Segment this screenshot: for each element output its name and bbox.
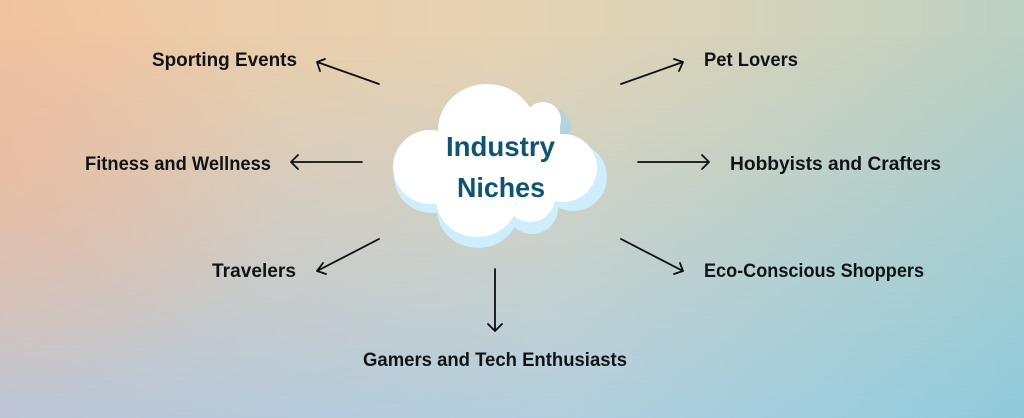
label: Gamers and Tech Enthusiasts: Gamers and Tech Enthusiasts <box>363 350 627 371</box>
label: Hobbyists and Crafters: Hobbyists and Crafters <box>730 154 941 175</box>
label: Fitness and Wellness: Fitness and Wellness <box>85 154 271 175</box>
arrow: to Gamers and Tech Enthusiasts <box>488 269 502 331</box>
label: Eco-Conscious Shoppers: Eco-Conscious Shoppers <box>704 261 924 282</box>
title <box>446 131 555 203</box>
label: Pet Lovers: Pet Lovers <box>704 50 798 71</box>
arrow: to Pet Lovers <box>621 59 683 84</box>
arrow: to Travelers <box>317 239 379 274</box>
label: Travelers: Travelers <box>212 261 296 282</box>
arrow: to Eco-Conscious Shoppers <box>621 239 683 274</box>
title: Niches <box>457 172 545 203</box>
arrow: to Hobbyists and Crafters <box>638 155 709 169</box>
arrow: to Sporting Events <box>317 59 379 84</box>
icon: cloud <box>393 84 607 248</box>
label: Sporting Events: Sporting Events <box>152 50 297 71</box>
arrow: to Fitness and Wellness <box>291 155 362 169</box>
title: Industry <box>446 131 555 162</box>
